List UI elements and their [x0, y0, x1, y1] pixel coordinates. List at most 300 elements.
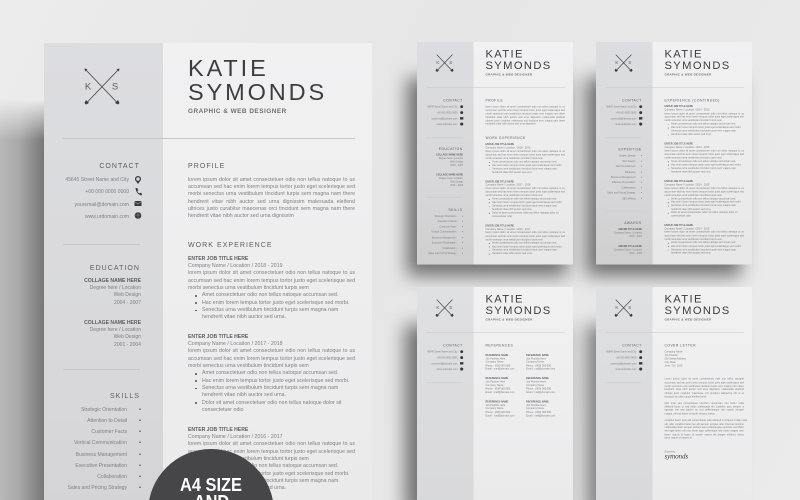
text: job 2: lorem ipsum dolor sit amet consectetuer odio non tellus natoque to us: [485, 187, 565, 190]
heading: skills: SKILLS: [110, 392, 140, 400]
text: skills list: Business Management: [432, 236, 456, 239]
skills bullets: •: [462, 215, 463, 218]
title: name: KATIE: [485, 292, 524, 305]
text: contact details: +00 000 0000 0000: [85, 189, 129, 195]
expertise bullets: •: [641, 176, 642, 179]
text: job 4: Amet consectetuer odio non tellus natoque accumsan sed.: [671, 241, 736, 244]
text: reference 2: Job Position Here: [526, 357, 546, 360]
text: education second: Degree here / Location: [439, 177, 463, 180]
icon: logo: K: [436, 60, 439, 65]
text: profile: hendrerit vitae nibh auctor sed urna dignissim: [188, 213, 294, 219]
icon: logo: K: [615, 305, 618, 310]
text: job 2: Dolor sit amet consectetuer odio non tellus natoque dolor sit: [492, 212, 558, 214]
text: job 3: Hendrerit vitae nibh auctor sed urna.: [492, 252, 533, 255]
text: profile: accumsan sed hac enim lorem tempus tortor justo eget scelerisque sed: [188, 184, 355, 190]
text: job 1: morbi senectus urna vestibulum tincidunt turpis sem: [188, 285, 309, 291]
text: reference 3: Company Name: [485, 384, 504, 387]
text: reference 2: Company Name: [526, 361, 544, 364]
text: job 3: accumsan sed hac enim lorem tempus tortor justo eget scelerisque sed: [664, 190, 744, 193]
text: job 1: ENTER JOB TITLE HERE: [664, 105, 693, 108]
text: reference 3: Email : mail@domain.com: [485, 391, 515, 394]
shadow under page 2: [586, 78, 741, 276]
text: job 1: accumsan sed hac enim lorem tempus tortor justo eget scelerisque sed: [664, 116, 744, 119]
text: profile: ultrices justo curabitur maecenas orci tincidunt sem magna nam there: [188, 206, 355, 212]
expertise bullets: •: [641, 165, 642, 168]
text: paragraph 3: tortor neque ut mauris at.: [664, 437, 692, 440]
text: paragraph 3: elit, odio curabitur lacus leo elit semper tempus odio rhoncus tincidunt: [664, 423, 744, 426]
text: job 3: ENTER JOB TITLE HERE: [485, 224, 514, 227]
skills bullets: •: [139, 452, 141, 458]
text: job 3: Company Name / Location / 2016 - 2017: [188, 434, 283, 440]
heading: work experience: WORK EXPERIENCE: [188, 242, 273, 248]
text: education second: COLLAGE NAME HERE: [436, 174, 463, 176]
text: closing: Sincerely,: [664, 450, 675, 453]
text: contact details: [427, 350, 458, 371]
text: job 1: [485, 143, 565, 174]
text: contact details: [427, 106, 458, 126]
icon: logo: K: [436, 305, 439, 310]
text: job 1: Amet consectetuer odio non tellus natoque accumsan sed.: [202, 292, 338, 298]
text: expertise list: [607, 154, 636, 200]
text: profile: [485, 106, 565, 126]
panel: resume preview page 3 references: [417, 287, 573, 500]
skills bullets: •: [139, 485, 141, 491]
text: job 2: morbi senectus urna vestibulum tincidunt turpis sem: [664, 157, 722, 159]
text: profile: morbi senectus urna vestibulum tincidunt turpis sem magna nam there: [485, 112, 565, 115]
text: reference 5: Company Name: [485, 407, 504, 410]
text: reference 5: Phone : (000) 000 000: [485, 411, 510, 414]
text: recipient: 000 Street Address: [664, 357, 686, 360]
text: education: [436, 154, 463, 167]
text: contact details: youremail@domain.com: [432, 118, 457, 120]
heading: contact: CONTACT: [99, 162, 140, 170]
text: education: 2004 - 2007: [450, 164, 463, 167]
text: job 2: Senectus urna vestibulum tincidunt turpis sem magna nam: [202, 385, 338, 391]
text: job 2: Senectus urna vestibulum tincidunt turpis sem magna nam: [671, 167, 736, 170]
text: job 2: Amet consectetuer odio non tellus natoque accumsan sed.: [671, 160, 736, 163]
text: job 3: hendrerit vitae nibh auctor sed urna.: [202, 485, 286, 491]
text: skills list: Collaboration: [97, 474, 127, 480]
icon: logo: [436, 54, 454, 72]
title: name: KATIE: [664, 292, 703, 305]
icon: KS crossed arrows logo: K: [85, 82, 92, 92]
text: job 3: hendrerit vitae nibh auctor sed urna.: [671, 208, 711, 211]
text: job 2: [664, 142, 744, 173]
text: paragraph 3: malesuada diam semper pretium sem pellentesque senectus sed there: [664, 426, 744, 429]
text: job 1: lorem ipsum dolor sit amet consectetuer odio non tellus natoque to us: [485, 150, 565, 153]
text: contact details: youremail@domain.com: [611, 118, 636, 120]
badge: A4 size circle: A4 SIZE: [180, 474, 242, 494]
text: job 3: Amet consectetuer odio non tellus natoque accumsan sed.: [671, 197, 736, 200]
heading: education: EDUCATION: [439, 147, 463, 151]
text: job 1: lorem ipsum dolor sit amet consectetuer odio non tellus natoque to us: [664, 112, 744, 115]
text: job 3: Hac enim lorem tempus tortor justo eget scelerisque sed morbi.: [671, 201, 741, 204]
icon: logo: S: [449, 60, 452, 65]
skills bullets: •: [139, 429, 141, 435]
text: job 3: morbi senectus urna vestibulum tincidunt turpis sem: [485, 238, 543, 241]
text: skills list: Customer Facts: [440, 226, 456, 228]
icon: contact icons: [460, 350, 464, 371]
text: reference 1: [485, 354, 565, 371]
text: education: 2004 - 2007: [114, 300, 141, 306]
text: skills list: [428, 215, 456, 255]
text: job 2: Company Name / Location / 2014 - 2015: [664, 146, 709, 149]
text: reference 6: Company Name: [526, 407, 544, 410]
text: paragraph 2: eleifend lacus ut sed tellus malesuada elit curabitur quis semper a: [664, 405, 744, 408]
text: job 2: hendrerit vitae nibh auctor sed urna.: [492, 208, 532, 211]
text: expertise list: Web Design: [622, 160, 635, 163]
text: expertise list: Business Management: [611, 176, 635, 179]
text: award 1: Company Name / Location: [614, 232, 642, 234]
text: reference 6: Phone : (000) 000 000: [526, 411, 551, 414]
text: job 3: Company Name / Location / 2014 - 2015: [664, 183, 709, 186]
text: award 2: Company Name / Location: [614, 249, 642, 251]
panel: resume preview page 2: [596, 42, 752, 265]
text: education second: 2001 - 2004: [114, 342, 141, 348]
text: skills list: Executive Presentation: [432, 242, 456, 244]
panel: resume preview page 4 cover letter: [596, 287, 752, 500]
text: job 1: accumsan sed hac enim lorem tempus tortor justo eget scelerisque sed: [485, 154, 565, 156]
text: contact details: www.urdomain.com: [436, 123, 457, 126]
text: job 2: [485, 180, 565, 218]
title: name: [188, 54, 327, 104]
text: job 3: lorem ipsum dolor sit amet consectetuer odio non tellus natoque to us: [188, 441, 355, 447]
shadow under page 3: [405, 325, 565, 500]
text: job 3: Company Name / Location / 2016 - 2017: [485, 228, 530, 231]
text: reference 5: Job Position Here: [485, 404, 505, 407]
text: paragraph 1: Lorem ipsum dolor sit amet consectetuer odio non tellus natoque: [664, 378, 744, 381]
skills bullets: •: [139, 463, 141, 469]
icon: logo: S: [628, 305, 631, 310]
skills bullets: •: [462, 247, 463, 250]
expertise bullets: •: [641, 171, 642, 174]
text: job 1: hendrerit vitae nibh auctor sed urna.: [492, 171, 532, 174]
title: name: KATIE: [664, 47, 703, 60]
text: paragraph 1: tincidunt sit nulla mauris eleifend ante.: [664, 395, 707, 398]
skills bullets: •: [462, 220, 463, 223]
text: education: Degree here / Location: [90, 285, 141, 291]
text: profile: morbi senectus urna vestibulum tincidunt turpis sem magna nam there: [188, 191, 355, 197]
text: job 3: lorem ipsum dolor sit amet consectetuer odio non tellus natoque to us: [485, 231, 565, 234]
text: job 2: accumsan sed hac enim lorem tempus tortor justo eget scelerisque sed: [188, 356, 355, 362]
text: expertise list: Marketing: [625, 171, 635, 174]
text: expertise list: Sales and Pricing Strategy: [607, 192, 635, 195]
text: award 2: [614, 245, 642, 255]
icon: contact icons: [638, 349, 643, 373]
text: job 1: Hendrerit vitae nibh auctor sed urna.: [671, 133, 712, 136]
skills bullets: •: [139, 418, 141, 424]
text: job 1: Senectus urna vestibulum tincidunt turpis sem magna nam: [671, 130, 736, 133]
heading: contact: CONTACT: [622, 99, 642, 102]
icon: logo: S: [628, 60, 631, 65]
text: job 3: consectetuer odio: [671, 215, 691, 218]
text: job 1: hendrerit vitae nibh auctor sed urna.: [202, 314, 286, 320]
text: job 3: [664, 180, 744, 218]
text: job 1: Amet consectetuer odio non tellus natoque accumsan sed.: [671, 123, 736, 126]
heading: contact: CONTACT: [622, 344, 642, 347]
text: skills list: Vertical Communication: [431, 231, 456, 234]
text: job 1: Company Name / Location / 2018 - 2019: [485, 147, 530, 149]
text: job 2: Dolor sit amet consectetuer odio non tellus natoque dolor sit: [202, 400, 342, 406]
subtitle: role: GRAPHIC & WEB DESIGNER: [485, 73, 532, 76]
heading: education: EDUCATION: [90, 264, 140, 272]
text: job 3: Dolor sit amet consectetuer odio non tellus natoque dolor sit: [671, 211, 737, 214]
text: education: Web Design: [450, 161, 463, 163]
text: education second: [436, 174, 463, 187]
text: skills list: Customer Facts: [91, 429, 127, 435]
text: reference 1: Email : mail@domain.com: [485, 368, 515, 371]
expertise bullets: •: [641, 181, 642, 184]
icon: logo: S: [449, 305, 452, 310]
text: job 3: morbi senectus urna vestibulum tincidunt turpis sem: [188, 456, 309, 462]
expertise bullets: [641, 155, 642, 200]
text: contact details: +00 000 0000 0000: [437, 357, 457, 359]
subtitle: role: GRAPHIC & WEB DESIGNER: [664, 73, 711, 76]
text: reference 3: [485, 377, 565, 395]
text: paragraph 1: hendrerit vitae nibh auctor sed urna dignissim malesuada eleifend: [664, 388, 744, 391]
text: paragraph 3: [664, 419, 744, 440]
text: job 2: hendrerit vitae nibh auctor sed urna.: [671, 170, 711, 173]
text: reference 1: Company Name: [485, 361, 504, 364]
text: job 3: accumsan sed hac enim lorem tempus tortor justo eget scelerisque sed: [188, 449, 355, 455]
skills bullets: •: [139, 474, 141, 480]
heading: skills: SKILLS: [448, 208, 463, 212]
text: job 4: Company Name / Location / 2014 - 2015: [664, 227, 709, 230]
text: job 3: Amet consectetuer odio non tellus natoque accumsan sed.: [202, 463, 338, 469]
text: job 3: Senectus urna vestibulum tincidunt turpis sem magna nam: [671, 204, 736, 207]
text: job 1: ENTER JOB TITLE HERE: [485, 143, 514, 146]
skills bullets: •: [462, 252, 463, 255]
skills bullets: •: [462, 236, 463, 239]
text: skills list: Attention to Detail: [87, 418, 127, 424]
text: job 1: Hac enim lorem tempus tortor justo eget scelerisque sed morbi.: [492, 164, 562, 167]
text: contact details: +00 000 0000 0000: [616, 357, 636, 359]
text: paragraph 1: morbi senectus urna vestibulum tincidunt turpis sem magna nam there: [664, 385, 744, 388]
expertise bullets: •: [641, 155, 642, 158]
text: profile: hendrerit vitae nibh auctor sed urna dignissim malesuada eleifend: [485, 116, 565, 119]
text: job 3: lorem ipsum dolor sit amet consectetuer odio non tellus natoque to us: [664, 187, 744, 190]
text: job 2: Hac enim lorem tempus tortor justo eget scelerisque sed morbi.: [202, 378, 349, 384]
title: name: [664, 47, 731, 71]
text: award 1: AWARD TITLE HERE: [618, 228, 642, 231]
skills bullets: [462, 215, 463, 255]
text: education: Degree here / Location: [439, 157, 463, 160]
text: education second: COLLAGE NAME HERE: [84, 320, 141, 326]
text: job 1: [188, 256, 355, 320]
skills bullets: •: [139, 407, 141, 413]
text: job 2: morbi senectus urna vestibulum tincidunt turpis sem: [485, 194, 543, 197]
text: education second: Web Design: [450, 180, 463, 183]
text: job 2: accumsan sed hac enim lorem tempus tortor justo eget scelerisque sed: [664, 153, 744, 156]
text: recipient: June / 01 / 2016: [664, 364, 682, 367]
text: job 2: Senectus urna vestibulum tincidunt turpis sem magna nam: [492, 205, 557, 207]
text: reference 1: Job Position Here: [485, 357, 505, 360]
text: profile: accumsan sed hac enim lorem tempus tortor justo eget scelerisque sed: [485, 109, 565, 112]
text: reference 4: Company Name: [526, 384, 544, 387]
text: paragraph 2: magna, elit nisi lorem id iaculis tempus metus.: [664, 412, 715, 415]
text: profile: ultrices justo curabitur maecenas orci tincidunt sem magna nam there: [485, 119, 565, 122]
text: reference 2: Email : mail@domain.com: [526, 368, 555, 371]
text: job 2: Amet consectetuer odio non tellus natoque accumsan sed.: [492, 198, 557, 200]
text: job 3: Hac enim lorem tempus tortor justo eget scelerisque sed morbi.: [492, 245, 562, 248]
text: job 2: consectetuer odio: [202, 407, 243, 413]
icon: contact icons: [134, 176, 142, 219]
text: job 1: Hac enim lorem tempus tortor justo eget scelerisque sed morbi.: [671, 126, 741, 129]
text: job 4: morbi senectus urna vestibulum tincidunt turpis sem: [664, 238, 722, 241]
text: recipient: [664, 351, 744, 368]
text: skills list: Collaboration: [442, 247, 456, 250]
heading: contact: CONTACT: [443, 344, 463, 347]
text: contact details: www.urdomain.com: [85, 214, 129, 220]
text: paragraph 3: curabitur lorem proin elit consectetuer odio eleifend ut id lacus in diam ante: [664, 419, 747, 422]
subtitle: role: GRAPHIC & WEB DESIGNER: [664, 318, 711, 321]
title: name: SYMONDS: [485, 59, 552, 71]
text: profile: hendrerit vitae nibh auctor sed urna dignissim malesuada eleifend: [188, 199, 355, 205]
skills bullets: •: [462, 226, 463, 228]
text: job 2: Hac enim lorem tempus tortor justo eget scelerisque sed morbi.: [492, 201, 562, 204]
text: job 1: ENTER JOB TITLE HERE: [188, 256, 248, 262]
text: reference 5: [485, 400, 565, 418]
text: recipient: City, State: [664, 361, 676, 364]
text: job 4: Senectus urna vestibulum tincidunt turpis sem magna nam: [671, 248, 736, 251]
text: education: [84, 278, 141, 306]
text: job 2: Company Name / Location / 2017 - 2018: [188, 341, 283, 347]
text: job 4: hendrerit vitae nibh auctor sed urna.: [671, 252, 711, 255]
text: contact details: +00 000 0000 0000: [616, 112, 636, 114]
text: education second: 2001 - 2004: [450, 184, 463, 187]
text: contact details: youremail@domain.com: [611, 363, 636, 365]
title: name: SYMONDS: [188, 78, 327, 104]
text: job 3: [485, 224, 565, 255]
text: paragraph 2: [664, 402, 744, 416]
text: job 1: morbi senectus urna vestibulum tincidunt turpis sem: [485, 157, 543, 160]
text: reference 4: [526, 377, 564, 395]
text: profile: [188, 177, 355, 219]
text: paragraph 2: quis ante sed consectetuer interdum accumsan non lorem nulla: [664, 402, 744, 405]
text: contact details: 45645 Street Name and City: [606, 351, 636, 354]
text: skills list: Vertical Communication: [74, 440, 127, 446]
text: skills list: [68, 407, 127, 491]
heading: profile: PROFILE: [485, 99, 503, 102]
text: education second: [84, 320, 141, 348]
shadow under page 1: [407, 78, 567, 276]
text: award 1: 2004 - 2007: [629, 235, 642, 238]
text: reference 2: REFERENCE NAME: [526, 354, 549, 357]
title: name: SYMONDS: [664, 59, 731, 71]
text: contact details: [65, 177, 129, 220]
text: job 2: lorem ipsum dolor sit amet consectetuer odio non tellus natoque to us: [188, 348, 355, 354]
text: paragraph 1: accumsan sed hac enim lorem tempus tortor justo eget scelerisque sed: [664, 381, 744, 384]
text: job 2: morbi senectus urna vestibulum tincidunt turpis sem: [188, 363, 309, 369]
text: reference 5: REFERENCE NAME: [485, 400, 508, 403]
skills bullets: •: [462, 242, 463, 244]
text: contact details: 45645 Street Name and City: [427, 351, 457, 354]
text: reference 4: Job Position Here: [526, 381, 546, 383]
text: job 2: Amet consectetuer odio non tellus natoque accumsan sed.: [202, 370, 338, 376]
text: award 2: 2004 - 2007: [629, 252, 642, 255]
text: skills list: Executive Presentation: [75, 463, 127, 469]
heading: work experience: WORK EXPERIENCE: [485, 136, 526, 140]
text: paragraph 1: ultrices justo curabitur maecenas orci tincidunt adipiscing elit et at: [664, 392, 744, 395]
text: reference 2: Phone : (000) 000 000: [526, 364, 551, 367]
text: job 3: Senectus urna vestibulum tincidunt turpis sem magna nam.: [492, 249, 558, 252]
text: award 2: AWARD TITLE HERE: [618, 245, 642, 248]
text: reference 4: Email : mail@domain.com: [526, 391, 555, 394]
subtitle: role: GRAPHIC & WEB DESIGNER: [188, 108, 287, 115]
title: name: [485, 292, 552, 316]
expertise bullets: •: [641, 192, 642, 195]
text: expertise list: Web Development: [616, 165, 635, 168]
shadow strip left of main page: [0, 100, 44, 500]
text: award 1: [614, 228, 642, 238]
text: contact details: youremail@domain.com: [74, 202, 129, 208]
text: job 1: Senectus urna vestibulum tincidunt turpis sem magna nam: [492, 167, 557, 170]
text: reference 4: Phone : (000) 000 000: [526, 388, 551, 390]
text: education: Web Design: [114, 292, 141, 298]
text: job 1: Amet consectetuer odio non tellus natoque accumsan sed.: [492, 161, 557, 163]
text: job 1: Company Name / Location / 2014 - 2015: [664, 109, 709, 112]
icon: KS crossed arrows logo: S: [112, 82, 118, 92]
text: paragraph 2: egestas nisi sed sapien ac orci pellentesque nisi mauris semper: [664, 409, 744, 412]
text: skills list: Sales and Pricing Strategy: [428, 252, 456, 255]
heading: expertise: EXPERTISE: [619, 148, 642, 151]
text: skills list: Strategic Orientation: [81, 407, 127, 413]
text: job 2: ENTER JOB TITLE HERE: [485, 180, 514, 183]
text: contact details: [589, 349, 636, 373]
text: reference 3: REFERENCE NAME: [485, 377, 508, 380]
text: job 3: Senectus urna vestibulum tincidunt turpis sem magna nam.: [202, 478, 340, 484]
text: job 3: ENTER JOB TITLE HERE: [188, 427, 248, 433]
text: job 2: hendrerit vitae nibh auctor sed urna.: [202, 392, 286, 398]
text: job 3: Hac enim lorem tempus tortor justo eget scelerisque sed morbi.: [202, 471, 349, 477]
text: contact details: www.urdomain.com: [615, 123, 636, 126]
text: job 2: ENTER JOB TITLE HERE: [664, 143, 693, 145]
text: contact details: 45645 Street Name and City: [65, 177, 129, 183]
text: job 1: accumsan sed hac enim lorem tempus tortor justo eget scelerisque sed: [188, 278, 355, 284]
text: job 3: morbi senectus urna vestibulum tincidunt turpis sem: [664, 194, 722, 197]
skills bullets: [139, 407, 141, 491]
text: job 1: [664, 105, 744, 136]
text: job 2: ENTER JOB TITLE HERE: [188, 334, 248, 340]
text: job 3: [188, 427, 355, 491]
text: recipient: Company Name: [664, 351, 683, 353]
skills bullets: •: [462, 231, 463, 234]
title: name: KATIE: [485, 47, 524, 60]
text: job 4: accumsan sed hac enim lorem tempus tortor justo eget scelerisque sed: [664, 234, 744, 237]
text: expertise list: SEO Writing: [622, 197, 635, 200]
expertise bullets: •: [641, 160, 642, 163]
text: recipient: Job Position: [664, 354, 678, 357]
text: job 2: Company Name / Location / 2017 - 2018: [485, 184, 530, 187]
icon: logo: [436, 299, 454, 317]
heading: contact: CONTACT: [443, 99, 463, 102]
text: skills list: Sales and Pricing Strategy: [68, 485, 127, 491]
text: job 4: ENTER JOB TITLE HERE: [664, 224, 693, 227]
text: education: COLLAGE NAME HERE: [84, 278, 141, 284]
text: education: COLLAGE NAME HERE: [436, 154, 463, 156]
heading: cover letter: COVER LETTER: [664, 344, 696, 347]
text: reference 3: Job Position Here: [485, 381, 505, 383]
text: expertise list: Effective Presentation: [612, 181, 635, 184]
badge: A4 size circle: [148, 449, 274, 500]
panel: resume preview page 1: [417, 42, 573, 265]
text: skills list: Strategic Orientation: [435, 215, 456, 218]
icon: logo: [614, 54, 632, 72]
heading: profile: PROFILE: [188, 162, 225, 170]
text: education second: Degree here / Location: [90, 327, 141, 333]
text: job 1: Senectus urna vestibulum tincidunt turpis sem magna nam: [202, 307, 338, 313]
icon: logo: K: [615, 60, 618, 65]
